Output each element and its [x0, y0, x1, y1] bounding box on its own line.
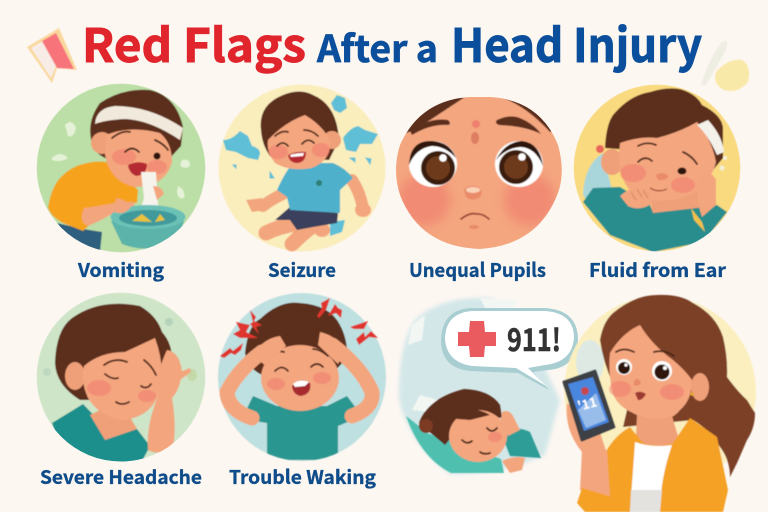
panel: vomiting — [36, 84, 206, 283]
illustration: child with severe headache — [36, 292, 206, 465]
icon: smartphone: '11 — [575, 391, 599, 415]
icon: red cross — [458, 321, 496, 357]
label: severe headache: Severe Headache — [40, 463, 202, 490]
callout: 911 speech bubble — [441, 308, 578, 390]
panel: call 911 — [399, 295, 756, 512]
icon: water splash right — [343, 126, 378, 152]
panel: fluid from ear — [574, 84, 740, 283]
illustration: face with unequal pupils — [396, 97, 562, 249]
label: seizure: Seizure — [268, 256, 336, 283]
icon: red flag — [27, 28, 77, 83]
icon: smartphone — [564, 371, 614, 440]
icon: water splash left — [223, 131, 260, 160]
panel: unequal pupils — [396, 97, 562, 282]
illustration: child holding head — [218, 293, 386, 461]
illustration: child having a seizure — [218, 84, 386, 252]
title: after a: After a — [316, 19, 438, 73]
icon: red pain bolts — [220, 298, 378, 358]
panel: trouble waking — [218, 293, 386, 490]
title — [27, 10, 749, 91]
illustration: sleepy child on pillow — [399, 298, 560, 474]
icon: water splash top — [331, 95, 347, 113]
label: trouble waking: Trouble Waking — [229, 463, 377, 490]
label: unequal pupils: Unequal Pupils — [409, 256, 546, 283]
illustration: child vomiting into basin — [36, 84, 206, 252]
label: fluid from ear: Fluid from Ear — [589, 256, 727, 283]
decorative splash — [701, 41, 749, 91]
text: 911!: 911! — [507, 315, 561, 360]
illustration: mother calling on phone — [564, 295, 756, 512]
panel: severe headache — [36, 292, 206, 490]
title: head injury: Head Injury — [451, 10, 702, 76]
title: red flags: Red Flags — [82, 10, 306, 76]
illustration: child with fluid from ear — [574, 84, 740, 252]
label: vomiting: Vomiting — [77, 256, 165, 283]
panel: seizure — [218, 84, 386, 283]
